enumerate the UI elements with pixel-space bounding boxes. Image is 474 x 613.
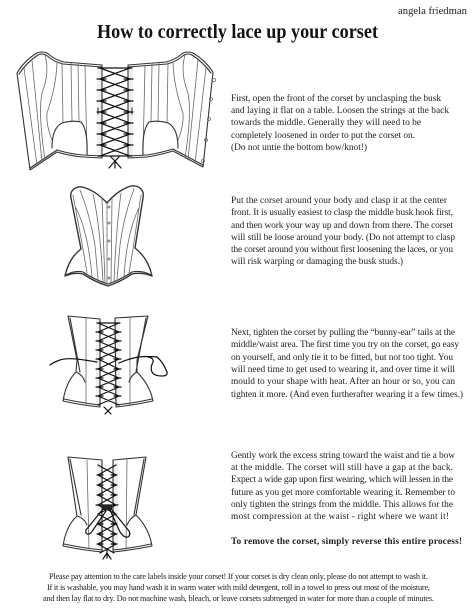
illustration: tied bow at the waist bbox=[63, 457, 152, 559]
footer: care instructions: Please pay attention to the care labels inside your corset! If your corset is dry clean only, please do not attempt to wash it. bbox=[49, 572, 428, 581]
busk studs bbox=[202, 78, 216, 162]
text: step 2: and then work your way up and down from there. The corset bbox=[231, 220, 453, 231]
corset body bbox=[63, 316, 153, 407]
left panel bbox=[17, 52, 102, 170]
text: step 3 bbox=[231, 328, 463, 400]
illustration: tightening the laces bbox=[50, 316, 167, 414]
lacing bbox=[96, 323, 121, 414]
text: step 4: Gently work the excess string toward the waist and tie a bow bbox=[231, 451, 455, 461]
text: step 1: completely loosened in order to put the corset on. bbox=[231, 131, 415, 141]
bow and loops bbox=[86, 505, 130, 537]
lacing bbox=[96, 465, 118, 559]
busk hooks bbox=[108, 206, 110, 279]
text: step 4 bbox=[231, 451, 455, 522]
text: step 3: middle/waist area. The first time you try on the corset, go easy bbox=[231, 339, 459, 350]
title: How to correctly lace up your corset bbox=[97, 21, 378, 43]
footer: care instructions: If it is washable, you may hand wash it in warm water with mild detergent, roll in a towel to press out most of the moisture, bbox=[47, 583, 430, 592]
text: step 2: the corset around you without first loosening the laces, or you bbox=[231, 244, 453, 255]
bunny-ear strings bbox=[50, 356, 167, 376]
text: step 4: at the middle. The corset will still have a gap at the back. bbox=[231, 463, 453, 473]
text: step 2: Put the corset around your body and clasp it at the center bbox=[231, 196, 448, 206]
right panel bbox=[128, 52, 213, 167]
text: step 2: front. It is usually easiest to clasp the middle busk hook first, bbox=[231, 207, 453, 218]
text: step 1: towards the middle. Generally they will need to be bbox=[231, 118, 421, 128]
text: step 4: only tighten the strings from the middle. This allows for the bbox=[231, 499, 453, 510]
illustration: corset laid open flat bbox=[17, 52, 216, 170]
text: step 4: future as you get more comfortable wearing it. Remember to bbox=[231, 487, 455, 498]
text: step 2: will risk warping or damaging the busk studs.) bbox=[231, 256, 403, 267]
text: step 1: (Do not untie the bottom bow/knot!) bbox=[231, 142, 367, 153]
footer: care instructions: and then lay flat to dry. Do not machine wash, bleach, or leave corsets submerged in water for more than a couple of minutes. bbox=[43, 594, 434, 603]
text: step 3: will need time to get used to wearing it, and over time it will bbox=[231, 365, 455, 375]
text: step 2 bbox=[231, 196, 455, 267]
text: step 1: and laying it flat on a table. Loosen the strings at the back bbox=[231, 105, 449, 116]
text: step 4: most compression at the waist - right where we want it! bbox=[231, 512, 449, 522]
text: step 1 bbox=[231, 93, 449, 153]
text: step 4: Expect a wide gap upon first wearing, which will lessen in the bbox=[231, 474, 453, 485]
text: step 3: tighten it more. (And even furtherafter wearing it a few times.) bbox=[231, 389, 463, 400]
closing note: removing the corset: To remove the corset, simply reverse this entire process! bbox=[231, 537, 462, 547]
text: step 1: First, open the front of the corset by unclasping the busk bbox=[231, 93, 441, 104]
corset body bbox=[63, 457, 152, 552]
text: step 3: on yourself, and only tie it to be fitted, but not too tight. You bbox=[231, 352, 453, 363]
footer: care instructions bbox=[43, 572, 434, 603]
text: step 3: mould to your shape with heat. After an hour or so, you can bbox=[231, 376, 455, 387]
text: step 2: will still be loose around your body. (Do not attempt to clasp bbox=[231, 232, 455, 243]
author credit: angela friedman bbox=[398, 6, 467, 17]
text: step 3: Next, tighten the corset by pulling the “bunny-ear” tails at the bbox=[231, 328, 455, 338]
illustration: corset front, closed bbox=[65, 186, 152, 286]
lacing bbox=[97, 68, 133, 168]
